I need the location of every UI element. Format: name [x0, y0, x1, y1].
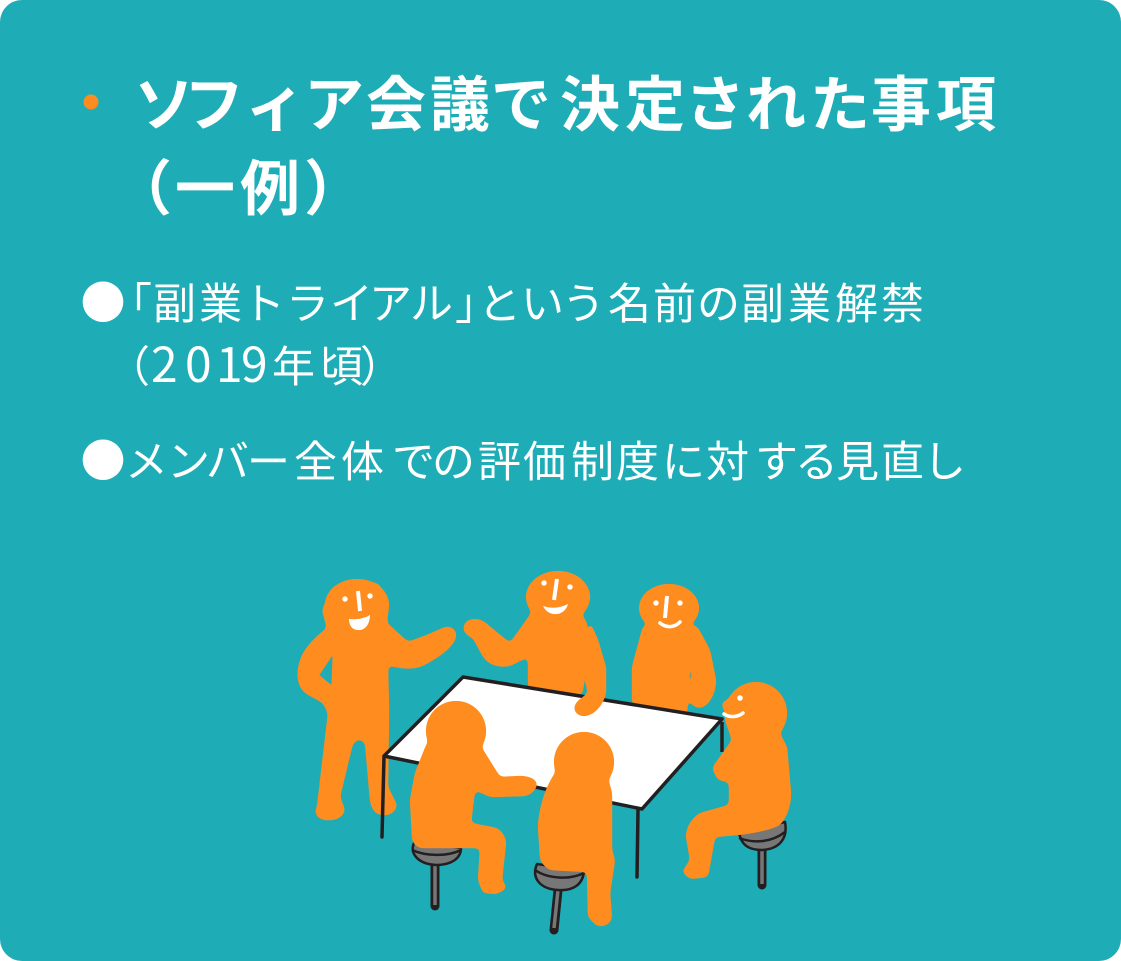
- list item 1: （: [107, 333, 150, 395]
- heading line 1: ソフィア会議で決定された事項: [134, 57, 996, 144]
- list of decisions: [80, 267, 966, 490]
- illustration: meeting around a table: [298, 571, 791, 930]
- person: seated front centre: [538, 732, 615, 926]
- person: standing left: [298, 579, 456, 820]
- person: seated right: [682, 682, 791, 879]
- arm of back centre person resting on table: [574, 622, 606, 716]
- list item 1: 「副業トライアル」という名前の副業解禁: [109, 270, 924, 332]
- icon: orange bullet: [84, 94, 98, 110]
- stool: front left: [412, 841, 461, 906]
- person: standing back centre: [463, 571, 590, 695]
- list item 2: メンバー全体での評価制度に対する見直し: [125, 428, 966, 490]
- face: seated right: [724, 695, 743, 717]
- list item 1: 年頃）: [272, 333, 403, 395]
- list item 2: ●: [80, 425, 126, 490]
- list item 1: ●: [80, 267, 126, 332]
- heading line 2: （一例）: [112, 141, 364, 228]
- stool: front centre: [535, 864, 584, 930]
- person: seated front left: [410, 701, 537, 894]
- heading: [84, 57, 996, 228]
- list item 1: [80, 267, 924, 396]
- list item 1: 2019: [151, 326, 268, 396]
- table top: [382, 677, 722, 877]
- stool: right: [739, 822, 786, 885]
- person: standing back right: [632, 584, 716, 716]
